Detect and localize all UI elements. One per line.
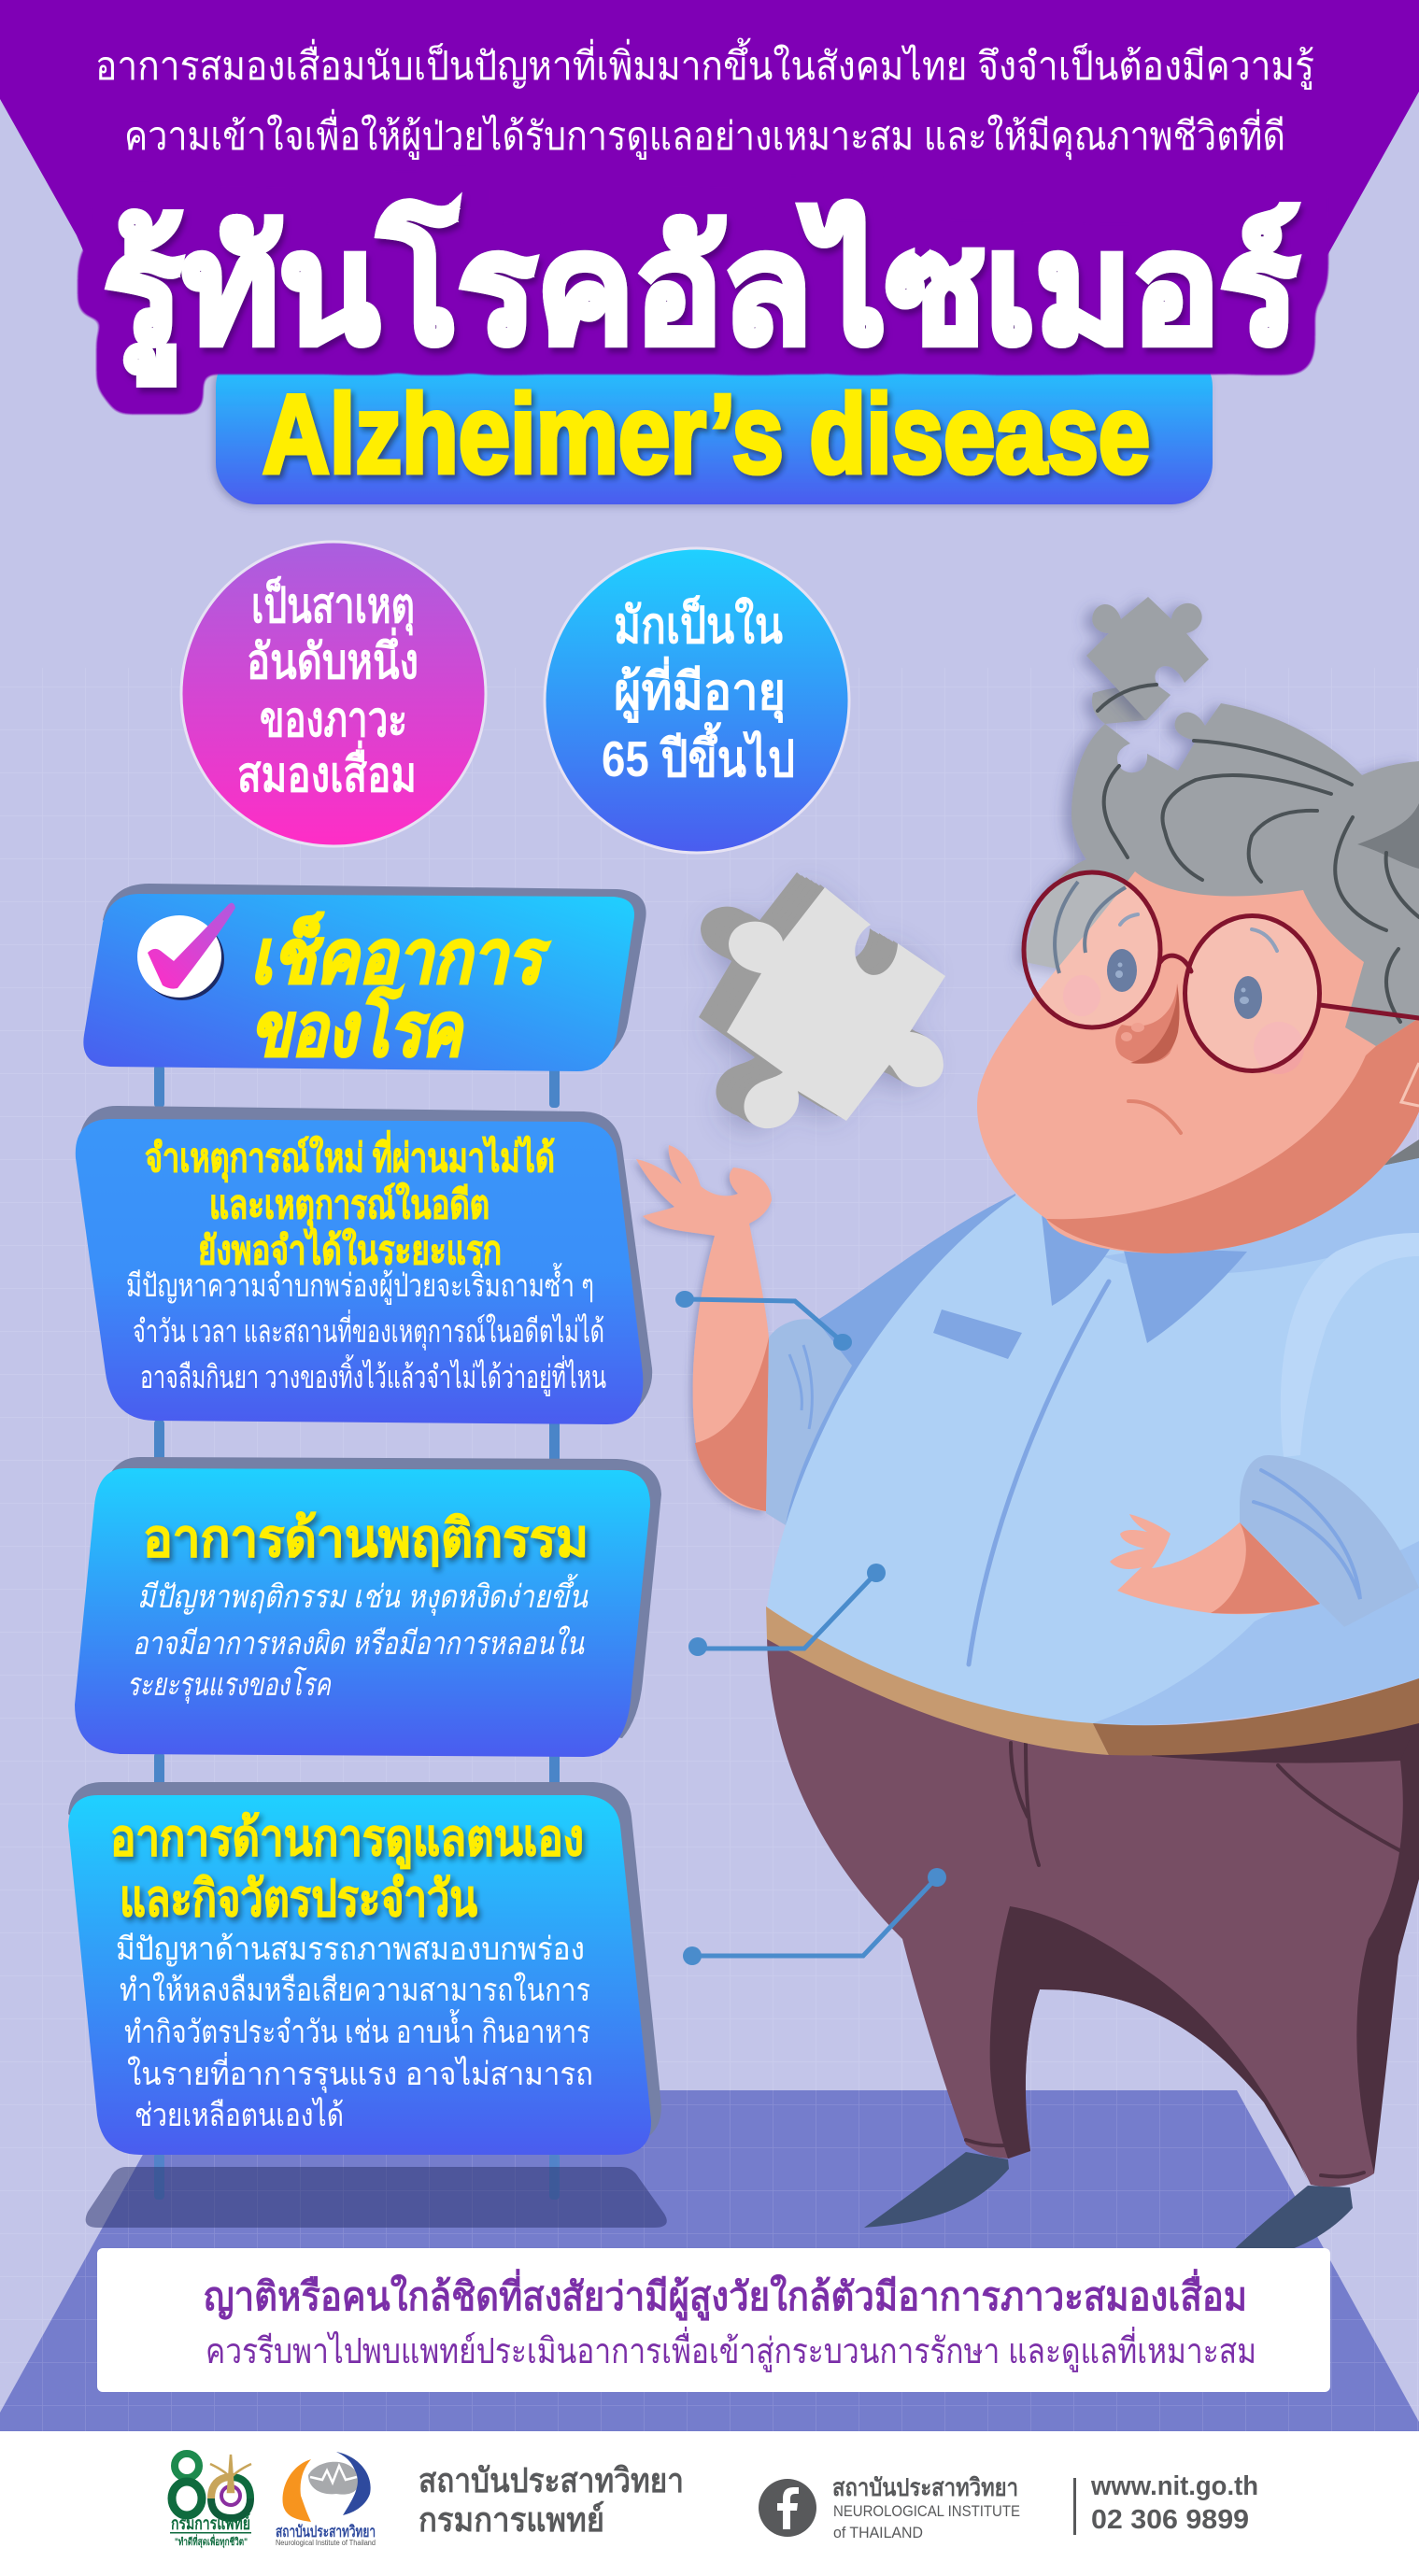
connector lines: [675, 1291, 946, 1965]
left sleeve: [766, 1319, 852, 1525]
panel: self care symptoms: ทำให้หลงลืมหรือเสียความสามารถในการ: [120, 1972, 590, 2008]
panel: self care symptoms: ช่วยเหลือตนเองได้: [135, 2097, 344, 2133]
belt: [766, 1606, 1419, 1755]
callout: [97, 2248, 1330, 2392]
right sleeve: [1240, 1455, 1419, 1627]
hair strokes: [1098, 685, 1419, 1022]
hair: [1025, 685, 1419, 1051]
facebook page name: of THAILAND: [833, 2524, 923, 2541]
panel: behaviour symptoms: อาจมีอาการหลงผิด หรือมีอาการหลอนใน: [133, 1625, 585, 1662]
character: man with dementia: [636, 597, 1419, 2260]
panel: behaviour symptoms: อาการด้านพฤติกรรม: [143, 1508, 589, 1567]
eyebrows: [1120, 914, 1277, 951]
placket seam: [969, 1281, 1109, 1664]
cheeks: [1063, 975, 1304, 1074]
panel: check symptoms heading: [83, 884, 646, 1071]
circle: age 65: มักเป็นใน: [614, 596, 783, 654]
circle: leading cause: อันดับหนึ่ง: [247, 628, 419, 689]
organisation name: สถาบันประสาทวิทยา: [419, 2461, 684, 2499]
panel: check symptoms heading: เช็คอาการ: [250, 912, 550, 998]
icon: facebook: [759, 2479, 816, 2537]
panel: self care symptoms: ทำกิจวัตรประจำวัน เช่น อาบน้ำ กินอาหาร: [124, 2009, 590, 2050]
puzzle piece above head: [1086, 597, 1209, 720]
panel: memory symptoms: [76, 1106, 652, 1424]
shirt: [767, 1158, 1419, 1725]
panel: self care symptoms: อาการด้านการดูแลตนเอง: [110, 1810, 584, 1869]
panel: self care symptoms: มีปัญหาด้านสมรรถภาพสมองบกพร่อง: [116, 1932, 585, 1967]
logo: Department of Medical Services 80 years: [170, 2454, 251, 2549]
title: รู้ทันโรคอัลไซเมอร์: [104, 200, 1298, 385]
neck / shirt back layer: [785, 1194, 1028, 1532]
facebook page name: [832, 2473, 1020, 2541]
facebook page name: NEUROLOGICAL INSTITUTE: [833, 2502, 1020, 2520]
shoes: [864, 2152, 1353, 2260]
panel: check symptoms heading: ของโรค: [250, 985, 464, 1071]
icon: check mark: [137, 903, 235, 1000]
panel: self care symptoms: [68, 1782, 661, 2155]
organisation name: กรมการแพทย์: [419, 2500, 604, 2539]
contact details: www.nit.go.th: [1090, 2471, 1258, 2501]
footer: [0, 2431, 1419, 2576]
circle: leading cause: เป็นสาเหตุ: [251, 576, 415, 636]
circle: leading cause: ของภาวะ: [260, 693, 407, 747]
circle: leading cause: [181, 542, 486, 846]
logo: Neurological Institute of Thailand: [276, 2452, 376, 2547]
intro text: [95, 37, 1314, 161]
pocket: [933, 1309, 1022, 1359]
collar: [1042, 1214, 1247, 1343]
top purple banner: [0, 0, 1419, 318]
panel: self care symptoms: และกิจวัตรประจำวัน: [120, 1871, 477, 1927]
circle: age 65: 65 ปีขึ้นไป: [602, 722, 795, 787]
circle: leading cause: สมองเสื่อม: [237, 741, 417, 802]
panel: memory symptoms: มีปัญหาความจำบกพร่องผู้ป่วยจะเริ่มถามซ้ำ ๆ: [126, 1263, 594, 1305]
logo: Department of Medical Services 80 years: กรมการแพทย์: [171, 2513, 250, 2534]
panel: behaviour symptoms: [75, 1457, 661, 1757]
circle: age 65: ผู้ที่มีอายุ: [614, 656, 786, 724]
right hand: [1110, 1514, 1320, 1614]
mouth: [1128, 1101, 1181, 1133]
contact details: 02 306 9899: [1091, 2505, 1249, 2535]
eyes: [1107, 949, 1262, 1019]
panel: memory symptoms: และเหตุการณ์ในอดีต: [209, 1182, 490, 1229]
logo: Neurological Institute of Thailand: สถาบันประสาทวิทยา: [276, 2523, 376, 2541]
panel: behaviour symptoms: ระยะรุนแรงของโรค: [127, 1666, 332, 1704]
pill: Alzheimer's disease: Alzheimer’s disease: [263, 372, 1150, 497]
sign posts: [154, 1065, 560, 2200]
facebook page name: สถาบันประสาทวิทยา: [832, 2473, 1018, 2501]
organisation name: [419, 2461, 684, 2539]
pill: Alzheimer's disease: [216, 346, 1213, 504]
left arm and hand: [636, 1145, 772, 1511]
panel: memory symptoms: จำเหตุการณ์ใหม่ ที่ผ่านมาไม่ได้: [145, 1130, 555, 1182]
circle: age 65: [545, 548, 849, 853]
loose puzzle piece: [699, 872, 945, 1128]
panel: memory symptoms: อาจลืมกินยา วางของทิ้งไว้แล้วจำไม่ได้ว่าอยู่ที่ไหน: [140, 1354, 606, 1396]
panel: memory symptoms: จำวัน เวลา และสถานที่ของเหตุการณ์ในอดีตไม่ได้: [133, 1309, 604, 1351]
intro text: ความเข้าใจเพื่อให้ผู้ป่วยได้รับการดูแลอย่างเหมาะสม และให้มีคุณภาพชีวิตที่ดี: [124, 109, 1285, 161]
panel: self care symptoms: ในรายที่อาการรุนแรง อาจไม่สามารถ: [127, 2052, 593, 2093]
sign base: [86, 2167, 667, 2228]
logo: Department of Medical Services 80 years: "ทำดีที่สุดเพื่อทุกชีวิต": [175, 2534, 248, 2549]
callout: ญาติหรือคนใกล้ชิดที่สงสัยว่ามีผู้สูงวัยใกล้ตัวมีอาการภาวะสมองเสื่อม: [204, 2269, 1247, 2321]
panel: memory symptoms: ยังพอจำได้ในระยะแรก: [198, 1227, 502, 1272]
nose: [1115, 984, 1180, 1064]
floor: [0, 2090, 1419, 2431]
logo: Neurological Institute of Thailand: Neurological Institute of Thailand: [276, 2539, 376, 2547]
trousers: [767, 1635, 1419, 2187]
contact details: [1090, 2471, 1258, 2535]
glasses: [1024, 872, 1419, 1070]
intro text: อาการสมองเสื่อมนับเป็นปัญหาที่เพิ่มมากขึ้นในสังคมไทย จึงจำเป็นต้องมีความรู้: [95, 37, 1314, 90]
panel: behaviour symptoms: มีปัญหาพฤติกรรม เช่น หงุดหงิดง่ายขึ้น: [137, 1573, 589, 1616]
face: [977, 871, 1419, 1253]
